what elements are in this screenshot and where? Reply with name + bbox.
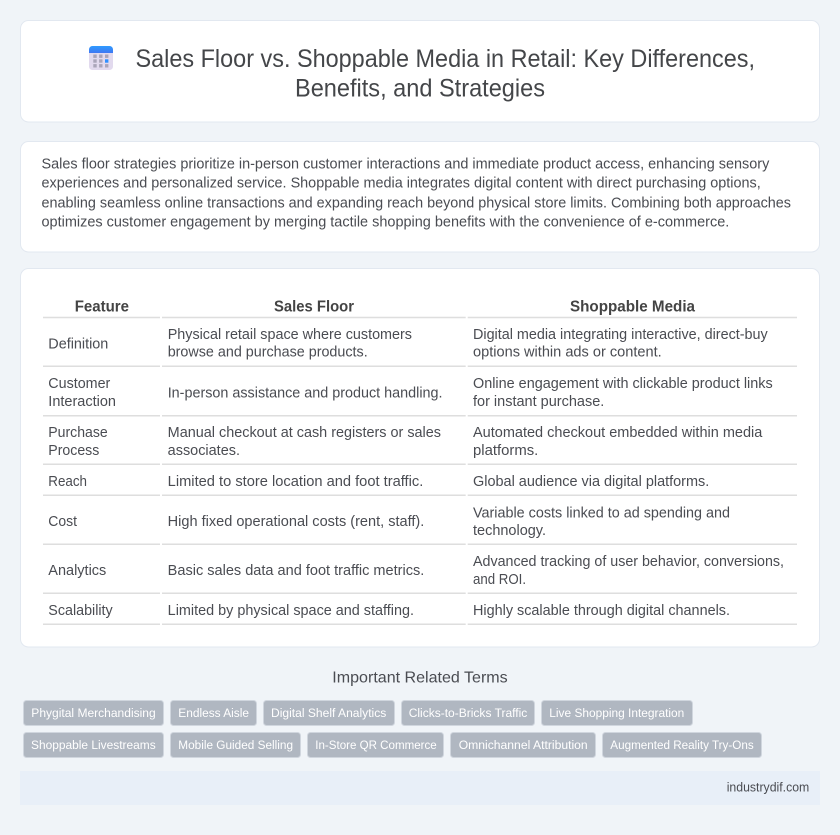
row: Scalability: Scalability [48, 603, 113, 619]
row: Analytics [48, 554, 784, 588]
row: Reach: Limited to store location and foot traffic. [168, 474, 423, 490]
row: Cost [48, 505, 730, 539]
row: Scalability: Highly scalable through digital channels. [473, 603, 730, 619]
chip: Phygital Merchandising: Phygital Merchandising [31, 706, 156, 720]
title: Sales Floor vs. Shoppable Media in Retail: Key Differences, [136, 45, 755, 73]
chip: Omnichannel Attribution: Omnichannel Attribution [459, 738, 588, 752]
table header row: Shoppable Media [570, 299, 695, 316]
row: Analytics: Advanced tracking of user behavior, conversions, [473, 554, 784, 570]
row: Analytics: Analytics [48, 563, 106, 579]
chip: Mobile Guided Selling [170, 732, 300, 758]
row: Cost: technology. [473, 523, 546, 539]
icon: calendar [89, 46, 113, 70]
row: Purchase Process: Purchase [48, 425, 108, 441]
row: Purchase Process: Automated checkout embedded within media [473, 425, 762, 441]
row: Definition: browse and purchase products. [168, 345, 368, 361]
row: Definition: Physical retail space where customers [168, 327, 412, 343]
row: Customer Interaction: Online engagement with clickable product links [473, 376, 773, 392]
panel: header [20, 20, 820, 122]
row: Purchase Process: Process [48, 443, 99, 459]
chip: Augmented Reality Try-Ons [602, 732, 762, 758]
row: Purchase Process: platforms. [473, 443, 538, 459]
row: Scalability: Limited by physical space and staffing. [168, 603, 414, 619]
row: Definition: options within ads or content. [473, 345, 662, 361]
row: Purchase Process: associates. [168, 443, 240, 459]
title: Benefits, and Strategies [295, 74, 545, 102]
row: Customer Interaction: Customer [48, 376, 110, 392]
chip: Endless Aisle [170, 700, 256, 726]
chip: Clicks-to-Bricks Traffic [402, 700, 534, 726]
table header row: Feature [75, 299, 129, 316]
related term chips [24, 700, 762, 758]
row: Reach [48, 474, 709, 490]
chip: Shoppable Livestreams [24, 732, 164, 758]
chip: Digital Shelf Analytics [264, 700, 394, 726]
row: Customer Interaction: for instant purchase. [473, 394, 604, 410]
row: Customer Interaction [48, 376, 773, 410]
row: Customer Interaction: In-person assistance and product handling. [168, 385, 442, 401]
text block: introduction paragraph [42, 156, 791, 231]
chip: Endless Aisle: Endless Aisle [178, 706, 249, 720]
row: Reach: Global audience via digital platforms. [473, 474, 709, 490]
chip: In-Store QR Commerce [308, 732, 444, 758]
chip: Clicks-to-Bricks Traffic: Clicks-to-Bricks Traffic [409, 706, 527, 720]
chip: Mobile Guided Selling: Mobile Guided Selling [178, 738, 293, 752]
chip: Live Shopping Integration: Live Shopping Integration [549, 706, 684, 720]
row: Definition: Digital media integrating interactive, direct-buy [473, 327, 768, 343]
chip: Digital Shelf Analytics: Digital Shelf Analytics [271, 706, 386, 720]
heading: important related terms: Important Related Terms [332, 670, 508, 687]
footer: industrydif.com [727, 781, 809, 795]
table header row: Sales Floor [274, 299, 354, 316]
chip: Augmented Reality Try-Ons: Augmented Reality Try-Ons [610, 738, 754, 752]
text block: introduction paragraph: optimizes customer engagement by merging tactile shopping benefits with the convenience of e-commerce. [42, 215, 729, 231]
text block: introduction paragraph: experiences and personalized service. Shoppable media integrates digital content with direct purchasing options, [42, 176, 761, 192]
footer [20, 771, 820, 805]
row: Purchase Process [48, 425, 762, 459]
table header row [75, 299, 695, 316]
row: Cost: High fixed operational costs (rent, staff). [168, 514, 424, 530]
title [136, 45, 755, 102]
chip: Live Shopping Integration [542, 700, 692, 726]
text block: introduction paragraph: enabling seamless online transactions and expanding reach beyond physical store limits. Combining both approaches [42, 195, 791, 211]
chip: Phygital Merchandising [24, 700, 164, 726]
chip: Shoppable Livestreams: Shoppable Livestreams [31, 738, 156, 752]
row: Analytics: Basic sales data and foot traffic metrics. [168, 563, 424, 579]
text block: introduction paragraph: Sales floor strategies prioritize in-person customer interactions and immediate product access, enhancing sensory [42, 156, 770, 172]
row: Scalability [48, 603, 730, 619]
row: Reach: Reach [48, 474, 87, 490]
chip: In-Store QR Commerce: In-Store QR Commerce [315, 738, 437, 752]
row: Customer Interaction: Interaction [48, 394, 116, 410]
panel: comparison table [20, 268, 820, 647]
row: Cost: Cost [48, 514, 77, 530]
row: Cost: Variable costs linked to ad spending and [473, 505, 730, 521]
row: Purchase Process: Manual checkout at cash registers or sales [168, 425, 441, 441]
chip: Omnichannel Attribution [450, 732, 596, 758]
panel: introduction [20, 142, 820, 252]
row: Definition: Definition [48, 336, 108, 352]
row: Analytics: and ROI. [473, 572, 526, 588]
row: Definition [48, 327, 768, 361]
